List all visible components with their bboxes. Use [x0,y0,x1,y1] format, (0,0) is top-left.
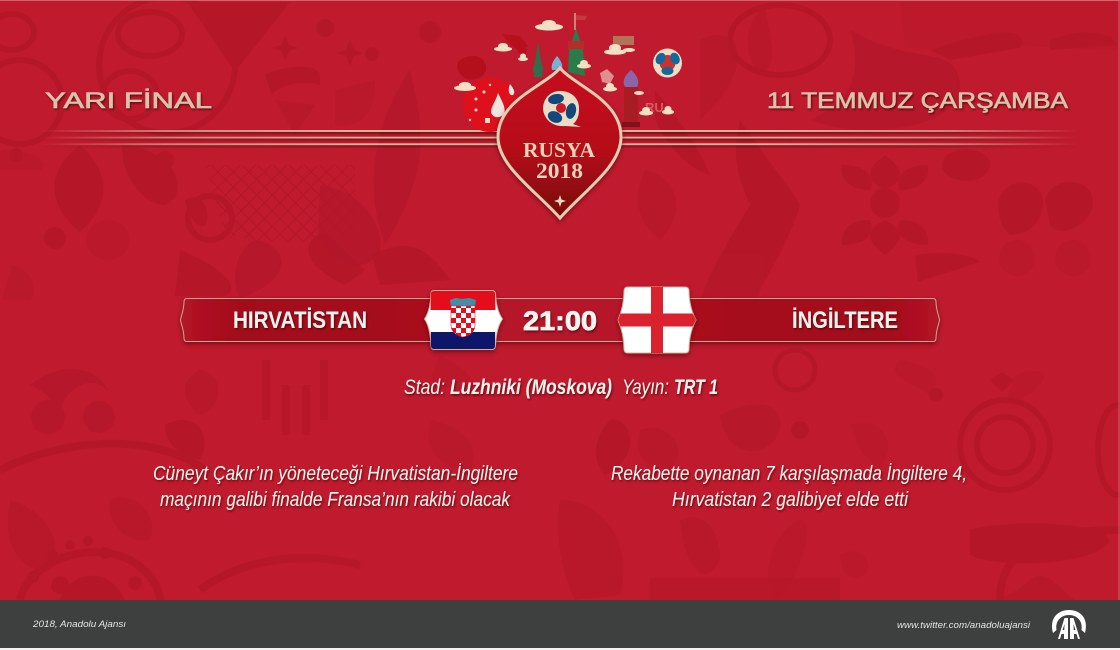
icon: onion dome tower [622,70,640,127]
kick-off time: 21:00 [523,306,597,336]
icon: blue dome [552,56,562,70]
flower ornament [842,155,928,255]
column ornament [262,360,328,435]
footer url: www.twitter.com/anadoluajansi [897,620,1031,631]
icon: kremlin wall [613,36,634,45]
lattice ornament [205,165,355,242]
footer credit: 2018, Anadolu Ajansı [32,619,126,630]
bottom edge [0,648,1120,650]
stadium and broadcaster: Yayın: [622,376,669,399]
badge shape [498,68,621,218]
stadium and broadcaster [404,376,718,399]
icon: clouds [454,20,674,116]
icon: small red clouds [502,34,528,56]
footer bar [0,600,1120,648]
heading: stage: YARI FİNAL [45,88,212,113]
badge text: Rusya: RUSYA [523,138,596,162]
stadium and broadcaster: Stad: [404,376,445,399]
icon: snowy dots [469,84,491,123]
text block: head-to-head note [611,463,967,511]
flag: Croatia [424,290,502,350]
illustration: Russian landmarks [454,13,682,132]
stadium and broadcaster: Luzhniki (Moskova) [450,376,612,399]
text block: referee note: maçının galibi finalde Fransa’nın rakibi olacak [160,489,511,511]
horizontal stripes [40,130,1078,145]
flag: coat of arms [450,298,476,337]
icon: football [653,48,682,78]
team name: England: İNGİLTERE [792,307,898,334]
icon: small green spire [533,42,543,77]
text block: head-to-head note: Rekabette oynanan 7 karşılaşmada İngiltere 4, [611,463,967,485]
icon: World Cup logo [543,91,581,127]
icon: red decorative blob [457,56,486,80]
team name: Croatia: HIRVATİSTAN [233,307,367,334]
icon: lace ornament [600,69,614,84]
text block: referee note: Cüneyt Çakır’ın yöneteceği Hırvatistan-İngiltere [153,463,518,485]
heading: date: 11 TEMMUZ ÇARŞAMBA [767,88,1068,113]
bar shape [180,298,940,342]
badge: Rusya 2018 emblem [498,68,621,218]
icon: white drop shape [491,84,514,117]
text block: referee note [153,463,518,511]
text block: head-to-head note: Hırvatistan 2 galibiyet elde etti [672,489,908,511]
icon: star [554,195,566,207]
icon: pale RU letters: RU [645,100,664,115]
panel: match bar [180,287,940,353]
icon: green kremlin tower [568,13,587,76]
icon: Anadolu Agency logo [1052,610,1086,639]
flag: England [618,287,696,353]
icon: big red ornament circle [463,78,517,132]
stadium and broadcaster: TRT 1 [674,376,718,399]
badge text: 2018: 2018 [536,158,583,183]
